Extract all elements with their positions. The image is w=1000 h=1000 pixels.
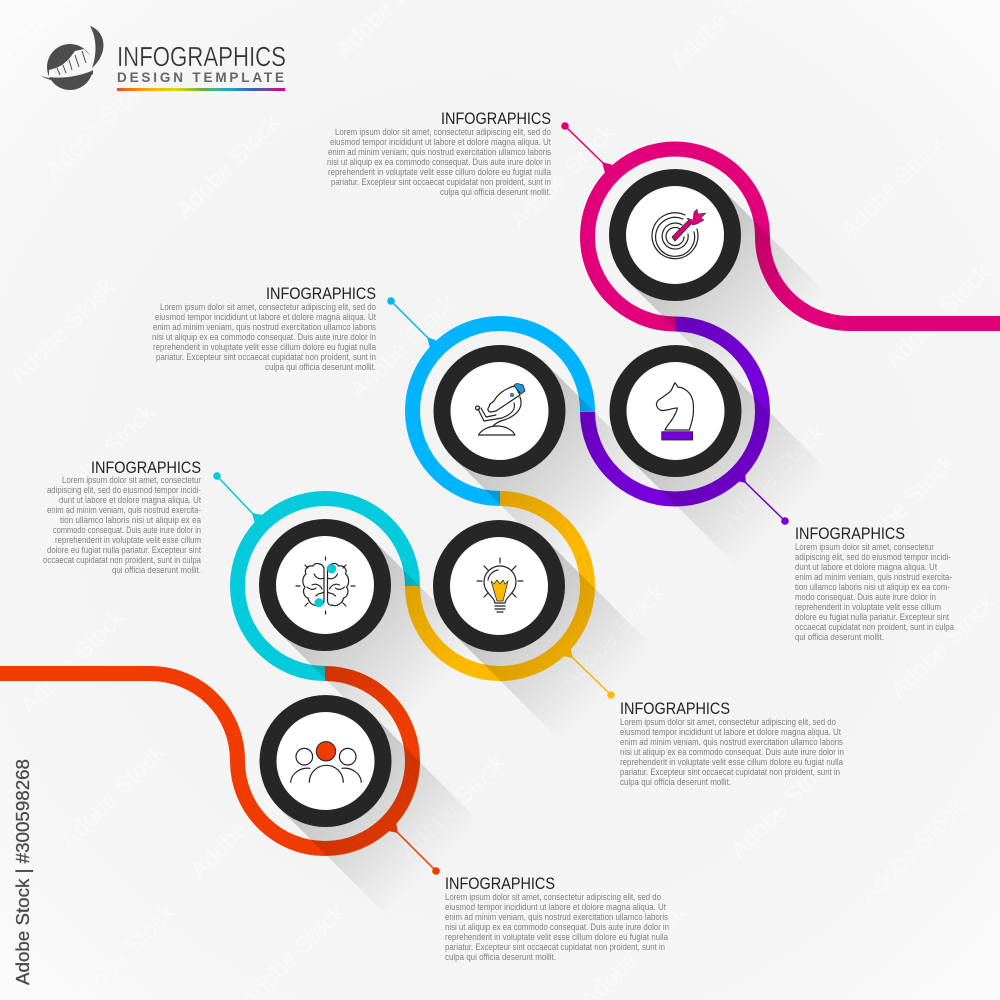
heading: INFOGRAPHICS (795, 524, 905, 543)
logo mark (41, 26, 104, 90)
body text: tion ullamco laboris nisi ut aliquip ex ea com- (795, 582, 950, 592)
body text: occaecat cupidatat non proident, sunt in culpa (795, 622, 954, 632)
text: Adobe Stock (55, 738, 171, 854)
text block: step 4 microscope (152, 284, 377, 372)
body text: nisi ut aliquip ex ea commodo consequat. Duis aute irure dolor in (620, 747, 844, 757)
text: Adobe Stock (170, 108, 286, 224)
heading: INFOGRAPHICS (266, 284, 376, 303)
body text (43, 475, 201, 575)
pin: purple (737, 472, 789, 525)
body text: culpa qui officia deserunt mollit. (620, 777, 731, 787)
body text: culpa qui officia deserunt mollit. (440, 187, 551, 197)
body text: Lorem ipsum dolor sit amet, consectetur adipiscing elit, sed do (445, 892, 661, 902)
node: brain (259, 519, 391, 651)
body text (152, 302, 377, 372)
body text: enim ad minim veniam, quis nostrud exercita- (795, 572, 952, 582)
body text: enim ad minim veniam, quis nostrud exercitation ullamco laboris (445, 912, 669, 922)
body text: nisi ut aliquip ex ea commodo consequat. Duis aute irure dolor in (327, 157, 551, 167)
pin: red (388, 822, 440, 875)
text: Adobe Stock (715, 418, 831, 534)
body text: reprehenderit in voluptate velit esse cillum (55, 535, 201, 545)
body text: eiusmod tempor incididunt ut labore et dolore magna aliqua. Ut (620, 727, 841, 737)
body text: occaecat cupidatat non proident, sunt in culpa (43, 555, 201, 565)
body text: reprehenderit in voluptate velit esse cillum (795, 602, 941, 612)
body text: reprehenderit in voluptate velit esse cillum dolore eu fugiat nulla (328, 167, 551, 177)
pin: blue (387, 297, 438, 348)
text: Adobe Stock (885, 588, 1000, 704)
body text: tion ullamco laboris nisi ut aliquip ex ea (60, 515, 201, 525)
pin: cyan (213, 472, 263, 524)
pin: pink (561, 122, 613, 173)
pin: yellow (563, 647, 615, 699)
body text: culpa qui officia deserunt mollit. (265, 362, 376, 372)
text block: step 6 target (327, 109, 552, 197)
body text: qui officia deserunt mollit. (795, 632, 884, 642)
body text (620, 717, 844, 787)
body text: pariatur. Excepteur sint occaecat cupidatat non proident, sunt in (156, 352, 376, 362)
connector pins (213, 122, 789, 875)
text: Adobe Stock (855, 793, 971, 909)
logo title: INFOGRAPHICS (117, 41, 286, 72)
ring: purple path (588, 324, 762, 499)
body text: enim ad minim veniam, quis nostrud exercitation ullamco laboris (153, 322, 377, 332)
node: chess knight (610, 345, 742, 477)
body text: reprehenderit in voluptate velit esse cillum dolore eu fugiat nulla (153, 342, 376, 352)
body text: enim ad minim veniam, quis nostrud exercitation ullamco laboris (328, 147, 552, 157)
body text: modo consequat. Duis aute irure dolor in (795, 592, 936, 602)
body text: nisi ut aliquip ex ea commodo consequat. Duis aute irure dolor in (445, 922, 669, 932)
rainbow underline (117, 88, 285, 91)
ring: yellow path (412, 498, 588, 674)
body text (327, 127, 552, 197)
logo subtitle: DESIGN TEMPLATE (117, 70, 284, 85)
text: Adobe Stock (880, 258, 996, 374)
body text: dunt ut labore et dolore magna aliqua. Ut (795, 562, 937, 572)
ring: cyan path (238, 498, 412, 674)
icon: target with arrow (652, 209, 706, 259)
body text: eiusmod tempor incididunt ut labore et dolore magna aliqua. Ut (330, 137, 551, 147)
body text: reprehenderit in voluptate velit esse cillum dolore eu fugiat nulla (445, 932, 668, 942)
text: Adobe Stock (345, 288, 461, 404)
stock id label: Adobe Stock | #300598268 (13, 759, 33, 985)
heading: INFOGRAPHICS (445, 874, 555, 893)
heading: INFOGRAPHICS (91, 458, 201, 477)
long shadows (278, 188, 831, 917)
ring: pink path (588, 149, 1000, 324)
body text: enim ad minim veniam, quis nostrud exercita- (47, 505, 201, 515)
body text: eiusmod tempor incididunt ut labore et dolore magna aliqua. Ut (155, 312, 376, 322)
text: Adobe Stock (15, 603, 131, 719)
icon: team of people (291, 742, 361, 782)
body text: eiusmod tempor incididunt ut labore et dolore magna aliqua. Ut (445, 902, 666, 912)
text: Adobe Stock (5, 273, 121, 389)
body text: enim ad minim veniam, quis nostrud exercitation ullamco laboris (620, 737, 844, 747)
body text: pariatur. Excepteur sint occaecat cupidatat non proident, sunt in (620, 767, 840, 777)
body text: nisi ut aliquip ex ea commodo consequat. Duis aute irure dolor in (152, 332, 376, 342)
node: microscope (434, 345, 566, 477)
text: Adobe Stock (505, 118, 621, 234)
ring: blue path (412, 323, 588, 498)
text: Adobe Stock (835, 128, 951, 244)
body text: Lorem ipsum dolor sit amet, consectetur (62, 475, 201, 485)
body text: dolore eu fugiat nulla pariatur. Excepteur sint (47, 545, 201, 555)
icon: light bulb (477, 558, 523, 612)
body text: dolore eu fugiat nulla pariatur. Excepteur sint (795, 612, 949, 622)
body text: pariatur. Excepteur sint occaecat cupidatat non proident, sunt in (445, 942, 665, 952)
body text: adipiscing elit, sed do eiusmod tempor incidi- (47, 485, 201, 495)
ring: red path (0, 674, 412, 848)
logo: infographics design template (41, 26, 286, 91)
text block: step 1 people (445, 874, 669, 962)
text block: step 3 light bulb (620, 699, 844, 787)
node: light bulb (433, 520, 565, 652)
heading: INFOGRAPHICS (620, 699, 730, 718)
icon: brain (296, 557, 355, 614)
text block: step 5 knight (795, 524, 954, 642)
body text: adipiscing elit, sed do eiusmod tempor incidi- (795, 552, 951, 562)
text: Adobe Stock (395, 748, 511, 864)
body text: reprehenderit in voluptate velit esse cillum dolore eu fugiat nulla (620, 757, 843, 767)
body text: Lorem ipsum dolor sit amet, consectetur adipiscing elit, sed do (335, 127, 551, 137)
text block: step 2 brain (43, 458, 201, 575)
text: Adobe Stock (45, 398, 161, 514)
text: Adobe Stock (725, 748, 841, 864)
text: Adobe Stock (555, 578, 671, 694)
text: Adobe Stock (845, 448, 961, 564)
icon: microscope (476, 384, 525, 435)
body text (445, 892, 669, 962)
node: people (260, 695, 392, 827)
text: Adobe Stock (40, 68, 156, 184)
body text: dunt ut labore et dolore magna aliqua. Ut (59, 495, 201, 505)
heading: INFOGRAPHICS (441, 109, 551, 128)
body text: pariatur. Excepteur sint occaecat cupidatat non proident, sunt in (331, 177, 551, 187)
body text (795, 542, 954, 642)
body text: commodo consequat. Duis aute irure dolor in (53, 525, 201, 535)
node: target (609, 169, 741, 301)
icon: chess knight (656, 383, 694, 440)
body text: Lorem ipsum dolor sit amet, consectetur adipiscing elit, sed do (160, 302, 376, 312)
body text: qui officia deserunt mollit. (112, 565, 201, 575)
text: Adobe Stock (185, 768, 301, 884)
body text: Lorem ipsum dolor sit amet, consectetur adipiscing elit, sed do (620, 717, 836, 727)
body text: culpa qui officia deserunt mollit. (445, 952, 556, 962)
body text: Lorem ipsum dolor sit amet, consectetur (795, 542, 934, 552)
